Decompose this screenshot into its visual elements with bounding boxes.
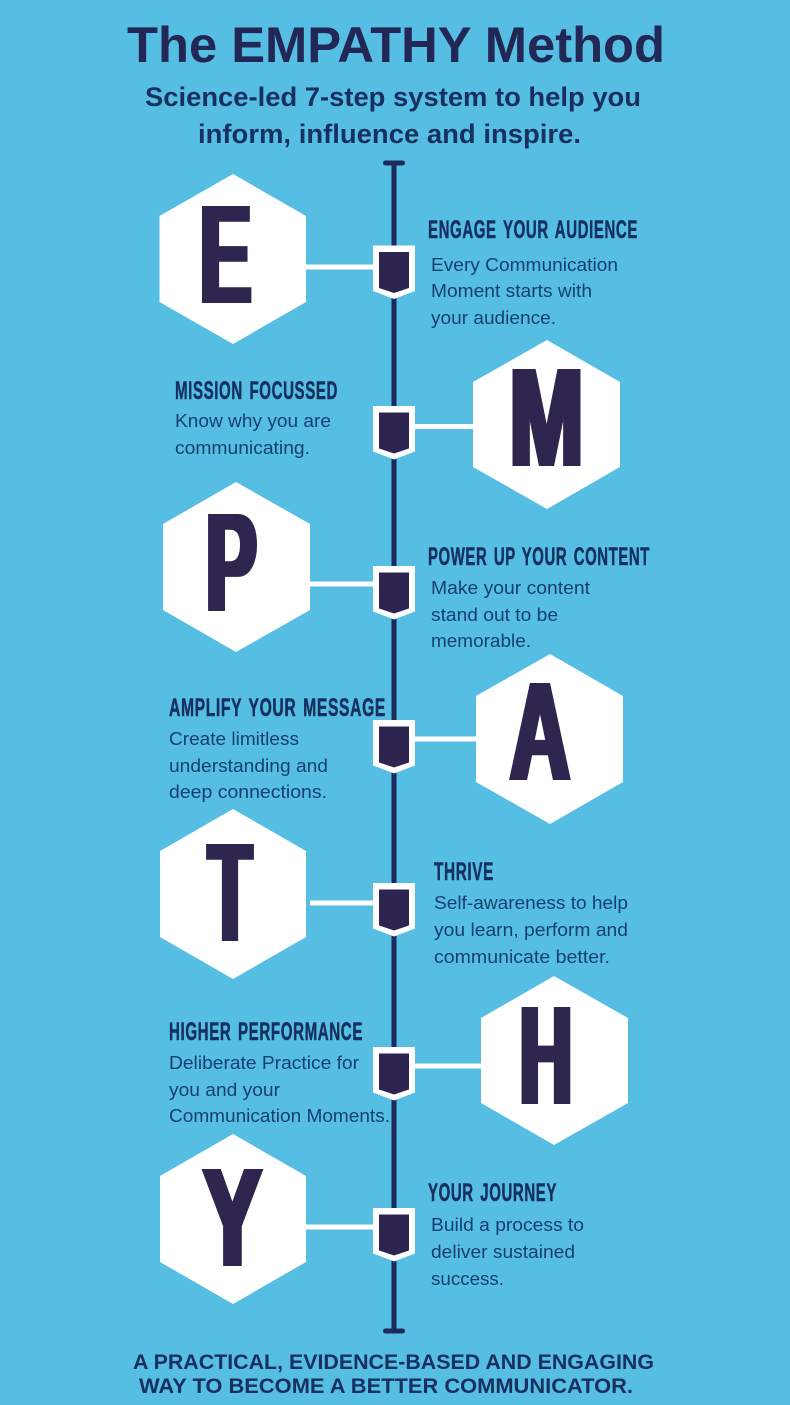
description E: Every Communication	[431, 254, 618, 275]
letter M: M	[510, 338, 583, 496]
step E: engage your audience	[160, 174, 638, 344]
hexagon M	[473, 340, 620, 509]
timeline vertical line	[383, 160, 405, 1334]
marker Y	[373, 1208, 415, 1262]
step H: higher performance	[169, 976, 628, 1145]
description T	[434, 892, 628, 967]
description Y: Build a process to	[431, 1214, 584, 1235]
letter P: P	[206, 483, 257, 641]
connector P	[310, 582, 376, 586]
hexagon H	[481, 976, 628, 1145]
connector H	[413, 1064, 482, 1068]
marker A	[373, 720, 415, 774]
description P: Make your content	[431, 577, 590, 598]
hexagon Y	[160, 1134, 306, 1304]
description A: deep connections.	[169, 781, 327, 802]
letter Y: Y	[203, 1138, 262, 1296]
subtitle: Science-led 7-step system to help you	[145, 82, 641, 112]
description T: you learn, perform and	[434, 919, 628, 940]
step M: mission focussed	[175, 338, 620, 509]
subtitle	[145, 82, 641, 149]
description T: communicate better.	[434, 946, 610, 967]
description H: you and your	[169, 1079, 280, 1100]
connector M	[413, 424, 474, 429]
description H: Communication Moments.	[169, 1105, 390, 1126]
description P: stand out to be	[431, 604, 558, 625]
marker H	[373, 1047, 415, 1100]
marker P	[373, 566, 415, 620]
description H	[169, 1052, 390, 1126]
footer tagline: A PRACTICAL, EVIDENCE-BASED AND ENGAGING	[133, 1351, 654, 1374]
description P	[431, 577, 590, 651]
step Y: your journey	[160, 1134, 584, 1304]
step P: power up your content	[163, 482, 650, 652]
description M	[175, 410, 331, 458]
heading A: AMPLIFY YOUR MESSAGE	[169, 694, 386, 722]
marker T	[373, 883, 415, 936]
hexagon P	[163, 482, 310, 652]
step A: amplify your message	[169, 652, 623, 824]
description E: your audience.	[431, 307, 556, 328]
description M: Know why you are	[175, 410, 331, 431]
description Y: deliver sustained	[431, 1241, 575, 1262]
description M: communicating.	[175, 437, 310, 458]
heading P: POWER UP YOUR CONTENT	[428, 543, 650, 571]
connector Y	[306, 1224, 376, 1230]
marker M	[373, 406, 415, 460]
description T: Self-awareness to help	[434, 892, 628, 913]
heading M: MISSION FOCUSSED	[175, 377, 338, 405]
connector E	[306, 264, 376, 270]
description H: Deliberate Practice for	[169, 1052, 359, 1073]
letter E: E	[200, 175, 251, 333]
description A: understanding and	[169, 755, 328, 776]
description A	[169, 728, 328, 802]
letter A: A	[510, 652, 570, 810]
hexagon E	[160, 174, 306, 344]
marker E	[373, 246, 415, 299]
step T: thrive	[160, 809, 628, 979]
connector A	[413, 736, 477, 742]
hexagon A	[476, 654, 623, 824]
heading E: ENGAGE YOUR AUDIENCE	[428, 216, 638, 244]
title: The EMPATHY Method	[127, 17, 665, 73]
description E	[431, 254, 618, 328]
footer tagline: WAY TO BECOME A BETTER COMMUNICATOR.	[139, 1375, 633, 1398]
connector T	[310, 900, 376, 906]
footer tagline	[133, 1351, 654, 1398]
letter T: T	[208, 813, 252, 971]
heading H: HIGHER PERFORMANCE	[169, 1018, 363, 1046]
hexagon T	[160, 809, 306, 979]
letter H: H	[520, 976, 572, 1134]
description Y	[431, 1214, 584, 1289]
description E: Moment starts with	[431, 280, 592, 301]
subtitle: inform, influence and inspire.	[198, 119, 581, 149]
heading T: THRIVE	[434, 858, 494, 886]
description Y: success.	[431, 1268, 504, 1289]
description A: Create limitless	[169, 728, 299, 749]
heading Y: YOUR JOURNEY	[428, 1179, 557, 1207]
description P: memorable.	[431, 630, 531, 651]
